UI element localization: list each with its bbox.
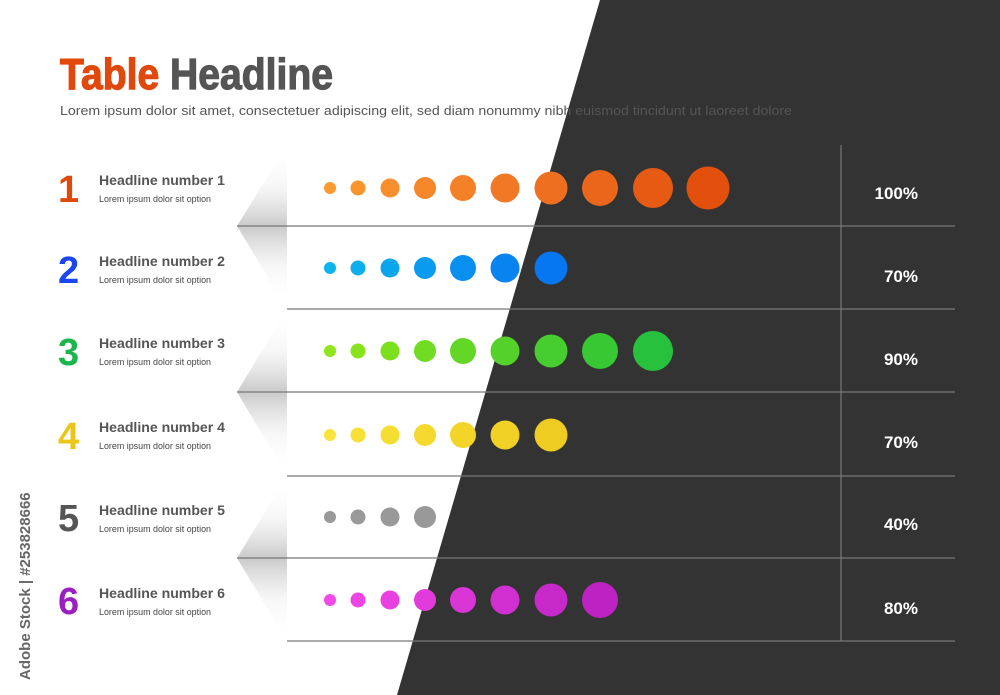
row 2: Headline number 2 [99,253,225,269]
row 1: 100% [875,184,918,203]
title: Table Headline [60,50,333,99]
row 6: 6 [58,581,79,623]
row 5: 5 [58,498,79,540]
row 6: Headline number 6 [99,585,225,601]
row 2: 70% [884,267,918,286]
row 2: 2 [58,250,79,292]
row 5: 40% [884,515,918,534]
row 6: Lorem ipsum dolor sit option [99,607,211,617]
row 1: 1 [58,169,79,211]
row 2: Lorem ipsum dolor sit option [99,275,211,285]
row 5 [58,498,918,540]
row 4 [58,416,918,458]
row 6 [58,581,918,623]
row 3: 90% [884,350,918,369]
row 3: Headline number 3 [99,335,225,351]
row 1: Lorem ipsum dolor sit option [99,194,211,204]
row 3 [58,331,918,374]
row 3: Lorem ipsum dolor sit option [99,357,211,367]
row 4: Headline number 4 [99,419,225,435]
chevron shadows [237,145,287,641]
row 5: Lorem ipsum dolor sit option [99,524,211,534]
row 4: 70% [884,433,918,452]
row 5: Headline number 5 [99,502,225,518]
watermark side text: Adobe Stock | #253828666 [17,492,34,680]
row 2 [58,250,918,292]
row 1: Headline number 1 [99,172,225,188]
row 1 [58,166,918,211]
row divider lines [237,145,955,641]
row 4: 4 [58,416,79,458]
row 3: 3 [58,332,79,374]
row 6: 80% [884,599,918,618]
row 4: Lorem ipsum dolor sit option [99,441,211,451]
subtitle: Lorem ipsum dolor sit amet, consectetuer adipiscing elit, sed diam nonummy nibh euismod tincidunt ut laoreet dolore [60,104,792,118]
dark background panel [397,0,1000,695]
